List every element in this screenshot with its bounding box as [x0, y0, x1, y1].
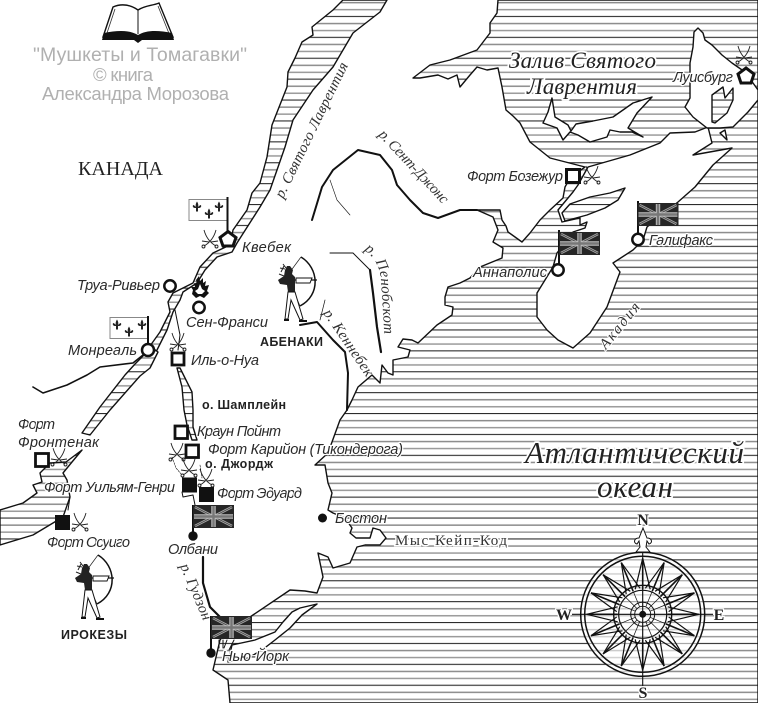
- label: Penobscot river: р. Пенобскот: [362, 245, 394, 334]
- label: Saint Francis: Сен-Франси: [186, 315, 268, 331]
- river: Hudson: [203, 557, 220, 617]
- compass: center: [639, 611, 646, 618]
- icon: town Saint Francis: [193, 302, 205, 313]
- flag: Britain at Albany: [193, 505, 234, 534]
- icon: town Montreal: [142, 344, 154, 356]
- label: Halifax: Галифакс: [649, 233, 714, 249]
- label: Crown Point: Краун Пойнт: [197, 424, 281, 440]
- label: Iroquois: ИРОКЕЗЫ: [61, 628, 127, 642]
- river: New York harbour: [219, 640, 234, 650]
- sea: gulf and Atlantic ocean with hatching: [213, 0, 758, 703]
- river: Ottawa: [33, 355, 143, 393]
- bay: Minas Basin: [562, 188, 625, 221]
- label: Annapolis: Аннаполис: [472, 265, 548, 281]
- river: Saint Lawrence to Lake Ontario: [82, 346, 158, 435]
- lake: Champlain: [177, 368, 197, 440]
- icon: pentagon fort Quebec: [220, 232, 236, 246]
- land: small island near Canso: [720, 130, 727, 140]
- river: Kennebec branch: [320, 300, 325, 320]
- river: Kennebec: [300, 322, 348, 410]
- icon: pentagon fort Louisbourg: [738, 68, 754, 83]
- icon: crossed sabres Beausejour: [584, 166, 600, 184]
- compass: sixteen star points: [587, 558, 699, 670]
- label: Fort Edward: Форт Эдуард: [217, 486, 302, 502]
- icon: town Halifax: [632, 234, 644, 245]
- compass: north letter: N: [637, 512, 649, 529]
- land: Cape Breton Island: [685, 28, 758, 128]
- icon: town Albany: [188, 531, 198, 541]
- label: Lake George: о. Джордж: [205, 457, 273, 471]
- icon: captured fort William Henry: [182, 478, 197, 492]
- icon: town Annapolis: [552, 264, 564, 276]
- icon: open book: [102, 3, 174, 43]
- compass: west letter: W: [556, 607, 572, 624]
- label: Trois-Rivieres: Труа-Ривьер: [77, 278, 160, 294]
- label: Quebec: Квебек: [242, 240, 292, 256]
- flag: Britain at Annapolis: [559, 230, 600, 266]
- river: upper Hudson: [182, 492, 195, 505]
- icon: crossed sabres Edward: [198, 469, 214, 487]
- compass: rings: [581, 552, 705, 676]
- icon: open fort Beausejour: [566, 170, 580, 182]
- icon: crossed sabres William Henry: [181, 459, 197, 477]
- icon: open fort Frontenac: [36, 454, 48, 466]
- icon: open fort Carillon: [186, 445, 198, 458]
- river: Lake George: [172, 457, 202, 478]
- town and fort labels: [18, 70, 733, 665]
- label: Canada: КАНАДА: [78, 158, 164, 180]
- watermark: copyright: © книга: [93, 64, 154, 85]
- label: New York: Нью-Йорк: [222, 647, 290, 665]
- label: Gulf of Saint Lawrence line 1: Залив Святого: [509, 48, 656, 73]
- label: Kennebec river: р. Кеннебек: [319, 305, 377, 381]
- compass: cross axes: [572, 552, 713, 686]
- icon: crossed sabres Quebec: [202, 230, 218, 248]
- icon: crossed sabres Carillon: [169, 443, 185, 461]
- label: Cape Cod: Мыс Кейп-Код: [395, 533, 507, 549]
- icon: town Boston: [318, 514, 327, 522]
- land: Long Island: [228, 604, 317, 662]
- river: Saint John branch: [330, 180, 350, 215]
- river: Penobscot: [330, 253, 370, 270]
- label: Hudson river: р. Гудзон: [176, 560, 214, 623]
- label: Saint John river: р. Сент-Джонс: [374, 126, 452, 207]
- label: Abenaki: АБЕНАКИ: [260, 335, 323, 349]
- rivers: [33, 150, 477, 650]
- watermark: book title: "Мушкеты и Томагавки": [33, 44, 247, 66]
- compass: east letter: E: [714, 607, 724, 624]
- label: Fort Frontenac line 2: Фронтенак: [18, 435, 100, 451]
- icon: captured fort Edward: [199, 487, 214, 502]
- lake: Bras d'Or: [712, 87, 733, 123]
- watermark: author: Александра Морозова: [42, 83, 230, 104]
- flag: France at Montreal: [110, 316, 148, 346]
- compass rose: [556, 512, 724, 702]
- flag: Britain at Halifax: [638, 201, 678, 235]
- label: Atlantic line 1: Атлантический: [523, 435, 744, 470]
- label: Lake Champlain: о. Шамплейн: [202, 398, 286, 412]
- label: Montreal: Монреаль: [68, 343, 137, 359]
- label: Fort Oswego: Форт Осуиго: [47, 535, 130, 551]
- lake: Ontario: [0, 450, 82, 545]
- label: Albany: Олбани: [168, 542, 218, 558]
- label: Louisbourg: Луисбург: [672, 70, 733, 86]
- label: Fort Frontenac line 1: Форт: [18, 417, 55, 433]
- label: Fort Carillon: Форт Карийон (Тикондерога): [208, 442, 403, 458]
- icon: crossed sabres Oswego: [72, 513, 88, 531]
- land: Prince Edward Island: [543, 97, 652, 142]
- flag: France at Quebec: [189, 197, 228, 232]
- label: Saint Lawrence river: р. Святого Лаврентия: [272, 60, 352, 202]
- icon: crossed sabres Louisbourg: [736, 46, 752, 64]
- compass: south letter: S: [639, 685, 648, 702]
- watermark text: [33, 44, 247, 104]
- label: Acadia: Акадия: [596, 300, 644, 353]
- icon: captured fort Oswego: [55, 515, 70, 530]
- river: Richelieu: [175, 310, 180, 350]
- river: Penobscot lower: [370, 270, 381, 352]
- icon: town Trois-Rivieres: [164, 280, 176, 292]
- river: Saint John: [312, 150, 477, 220]
- label: Atlantic line 2: океан: [597, 469, 673, 504]
- icon: crossed sabres Frontenac: [51, 448, 67, 466]
- river: Saint Lawrence estuary with hatching: [150, 0, 387, 352]
- label: Gulf of Saint Lawrence line 2: Лаврентия: [526, 74, 637, 99]
- flag: Britain at New York: [211, 616, 252, 652]
- icon: archer Abenaki: [278, 257, 317, 321]
- icon: town New York: [206, 648, 216, 658]
- icon: archer Iroquois: [75, 555, 114, 619]
- label: Fort Beausejour: Форт Бозежур: [467, 169, 563, 185]
- label: Fort William Henry: Форт Уильям-Генри: [44, 480, 175, 496]
- river: Oswego: [68, 497, 70, 510]
- compass: north fleur: [635, 528, 651, 552]
- icon: fire at Saint Francis: [191, 276, 209, 298]
- icon: open fort Crown Point: [175, 426, 188, 438]
- label: Boston: Бостон: [335, 511, 387, 527]
- land: Nova Scotia: [537, 127, 732, 348]
- label: Ile-aux-Noix: Иль-о-Нуа: [191, 353, 259, 369]
- icon: crossed sabres Saint Francis road: [170, 333, 186, 351]
- icon: open fort Ile-aux-Noix: [172, 353, 184, 365]
